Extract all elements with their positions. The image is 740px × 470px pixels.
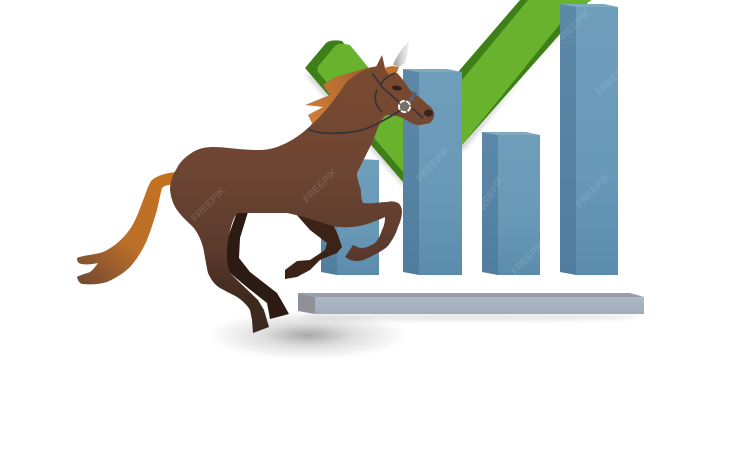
mane	[305, 66, 385, 130]
mane forelock	[384, 66, 399, 75]
horn	[393, 41, 409, 67]
watermark text: FREEPIK	[574, 171, 613, 210]
ground shadow	[208, 310, 408, 360]
watermark text: FREEPIK	[475, 174, 507, 218]
bar chart	[321, 4, 618, 275]
eye	[392, 85, 402, 91]
green check mark arrow	[304, 0, 592, 186]
watermark text: FREEPIK	[189, 185, 228, 224]
bridle and reins	[308, 73, 423, 133]
body, near legs and head	[170, 55, 434, 333]
watermark text: FREEPIK	[301, 166, 340, 205]
watermark text: FREEPIK	[554, 7, 593, 46]
watermark text: FREEPIK	[414, 145, 453, 184]
noseband	[410, 92, 415, 102]
far front leg	[285, 213, 342, 279]
bar 1	[321, 158, 379, 275]
watermark text: FREEPIK	[594, 59, 633, 98]
bit ring	[399, 101, 410, 112]
horse	[77, 41, 434, 333]
bar 2	[403, 69, 462, 275]
far hind leg	[226, 212, 289, 319]
bar 3	[482, 132, 540, 275]
platform base	[298, 293, 644, 321]
watermark text: FREEPIK	[509, 238, 548, 277]
tail	[77, 172, 176, 284]
bar 4	[560, 4, 618, 275]
watermark text	[189, 7, 633, 277]
muzzle	[424, 110, 433, 116]
